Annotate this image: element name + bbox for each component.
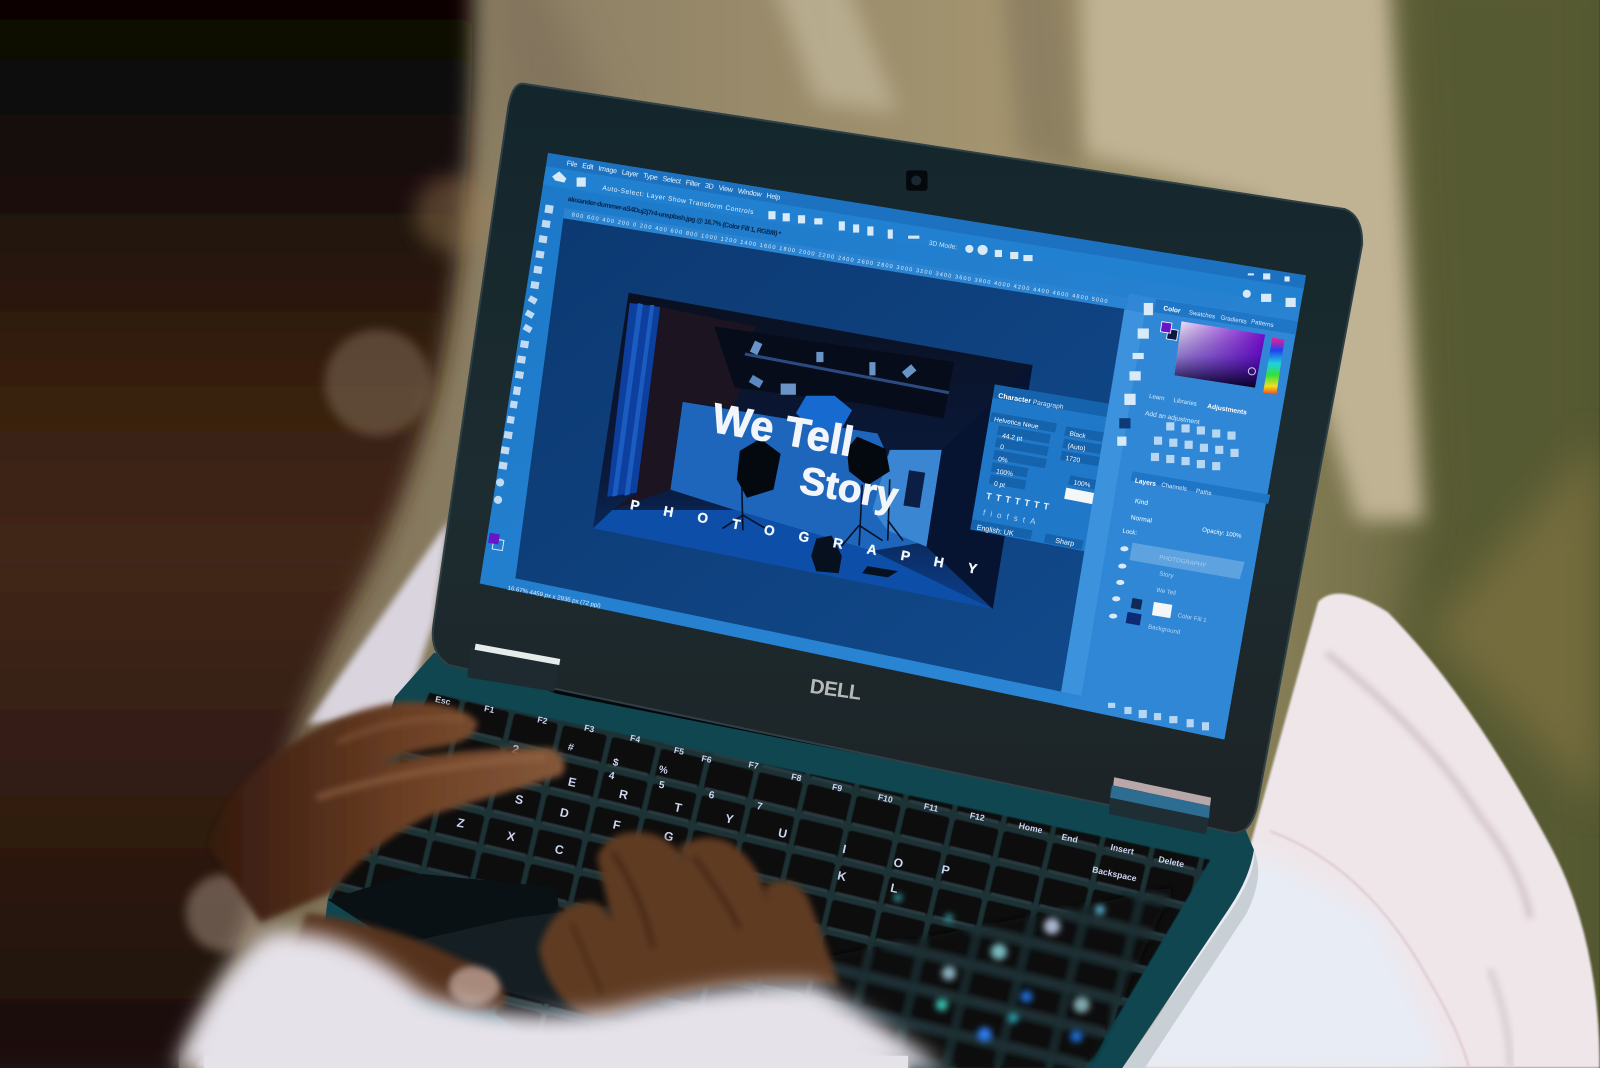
bokeh light bbox=[325, 329, 431, 436]
floor object bbox=[811, 536, 842, 573]
options bar bbox=[543, 166, 1304, 306]
keyboard labels: L bbox=[889, 881, 900, 896]
keyboard labels: $ bbox=[612, 757, 620, 769]
keyboard labels: Z bbox=[456, 815, 466, 831]
thumb bbox=[286, 913, 506, 1012]
hands bbox=[209, 702, 839, 1020]
character panel: fiofstA bbox=[982, 508, 1041, 527]
right curtain bbox=[926, 365, 1033, 609]
document image: studio bbox=[593, 293, 1033, 609]
menu bar: File Edit Image Layer Type Select Filter 3D View Window Help bbox=[566, 159, 781, 202]
option icons bbox=[552, 171, 1033, 261]
right panels: Libraries bbox=[1173, 397, 1197, 408]
keyboard labels: % bbox=[658, 764, 669, 777]
right panels: Background bbox=[1147, 623, 1181, 636]
keyboard labels: D bbox=[559, 805, 570, 821]
blurred key lights bbox=[894, 894, 1105, 1042]
softbox right bbox=[847, 437, 890, 486]
character panel: 100% bbox=[996, 468, 1013, 478]
hinge: left bbox=[467, 644, 560, 692]
keyboard labels bbox=[434, 694, 1185, 896]
right panels: Kind bbox=[1134, 498, 1149, 507]
wall bbox=[670, 402, 934, 551]
adjustment icons bbox=[1151, 422, 1239, 470]
ceiling rig bbox=[714, 326, 954, 418]
ruler: 800 600 400 200 0 200 400 600 800 1000 1200 1400 1600 1800 2000 2200 2400 2600 2800 3000 3200 3400 3600 3800 4000 4200 4400 4600 4800 5000 bbox=[571, 212, 1108, 305]
keyboard labels: 5 bbox=[658, 780, 666, 792]
right panels: Channels bbox=[1161, 482, 1187, 493]
curtain bbox=[607, 303, 660, 497]
keyboard labels: F1 bbox=[483, 703, 496, 715]
keyboard labels: R bbox=[618, 787, 630, 802]
keyboard labels: # bbox=[567, 742, 575, 754]
keyboard labels: I bbox=[841, 842, 847, 856]
keyboard labels: F2 bbox=[536, 714, 549, 726]
keyboard labels: End bbox=[1061, 832, 1079, 845]
tripods bbox=[722, 479, 903, 546]
character panel: Black bbox=[1069, 431, 1087, 440]
keyboard labels: K bbox=[836, 869, 848, 884]
character panel: 100% bbox=[1073, 480, 1091, 489]
keyboard labels: 7 bbox=[756, 801, 764, 813]
keys bbox=[332, 693, 1210, 1068]
right panels: Swatches bbox=[1188, 309, 1216, 321]
keyboard labels: X bbox=[506, 829, 517, 844]
character panel: Character bbox=[998, 392, 1032, 405]
bokeh light bbox=[186, 874, 263, 952]
character panel: Helvetica Neue bbox=[993, 416, 1039, 431]
heading: We Tell: We Tell bbox=[709, 394, 857, 465]
overhead softbox glow bbox=[796, 396, 852, 428]
character panel: 0% bbox=[998, 456, 1008, 465]
right panels: PHOTOGRAPHY bbox=[1159, 554, 1207, 569]
character fields bbox=[970, 412, 1104, 550]
hue slider bbox=[1263, 338, 1285, 395]
keyboard labels: 6 bbox=[708, 790, 716, 802]
window and search icons bbox=[1243, 273, 1296, 307]
keyboard labels: O bbox=[892, 855, 904, 871]
white flat bbox=[872, 450, 942, 547]
right panels: Patterns bbox=[1251, 318, 1274, 329]
keyboard labels: Y bbox=[724, 811, 735, 827]
keyboard labels: Esc bbox=[434, 694, 452, 707]
right panels: We Tell bbox=[1156, 587, 1176, 597]
right panels: Normal bbox=[1130, 514, 1153, 525]
color picker bbox=[1174, 321, 1265, 388]
keyboard labels: P bbox=[940, 862, 951, 878]
character panel: Sharp bbox=[1055, 537, 1075, 548]
right panels: Gradients bbox=[1220, 314, 1247, 326]
character panel: 0 bbox=[1000, 444, 1005, 451]
right panels: Story bbox=[1159, 570, 1175, 580]
keyboard labels: C bbox=[554, 842, 565, 858]
right panels: Paths bbox=[1195, 488, 1212, 497]
character panel: Paragraph bbox=[1032, 399, 1064, 411]
keyboard labels: 4 bbox=[608, 770, 616, 782]
DELL logo: DELL bbox=[808, 676, 862, 705]
status bar: 16.67% 4459 px x 2936 px (72 ppi) bbox=[507, 585, 601, 610]
screen bbox=[480, 153, 1306, 740]
keyboard labels: F7 bbox=[748, 759, 760, 771]
keyboard deck bbox=[306, 653, 1258, 1068]
palm rest bbox=[328, 873, 572, 1010]
background thumbnail bbox=[1126, 612, 1142, 625]
webcam bbox=[906, 170, 928, 191]
options bar: Auto-Select: Layer Show Transform Controls bbox=[602, 185, 755, 216]
right panels: Layers bbox=[1134, 478, 1157, 488]
floor bbox=[593, 510, 993, 609]
keyboard labels: E bbox=[567, 775, 578, 790]
keyboard labels: F5 bbox=[673, 745, 685, 757]
white cloth on the lap bbox=[306, 520, 1600, 1068]
toolbar bbox=[494, 204, 554, 504]
character panel: 44.2 pt bbox=[1002, 433, 1023, 443]
foreground and background swatches bbox=[1160, 322, 1178, 340]
left hand bbox=[209, 702, 565, 923]
keyboard labels: 2 bbox=[511, 742, 520, 757]
softbox left bbox=[737, 439, 781, 498]
layer visibility icons bbox=[1109, 546, 1128, 619]
keyboard labels: T bbox=[673, 800, 684, 816]
canvas area bbox=[515, 218, 1125, 692]
keyboard labels: S bbox=[514, 792, 525, 807]
keyboard labels: F bbox=[612, 818, 622, 833]
right panels: Add an adjustment bbox=[1144, 410, 1200, 426]
blurred white sleeve in the foreground bbox=[176, 932, 944, 1068]
keyboard labels: Insert bbox=[1110, 842, 1135, 857]
keyboard labels: Backspace bbox=[1091, 864, 1138, 884]
character panel: 0 pt bbox=[993, 481, 1006, 489]
keyboard labels: F11 bbox=[923, 801, 939, 814]
layer panel footer icons bbox=[1108, 703, 1209, 730]
foreground color swatch bbox=[488, 533, 504, 551]
photoshop window bbox=[480, 153, 1306, 740]
color fill thumbnail bbox=[1152, 602, 1172, 618]
heading: PHOTOGRAPHY: PHOTOGRAPHY bbox=[629, 497, 1002, 581]
keyboard labels: F12 bbox=[969, 810, 986, 823]
menu bar bbox=[546, 153, 1306, 289]
right panels: Color Fill 1 bbox=[1177, 612, 1208, 624]
bokeh light bbox=[415, 175, 493, 253]
heading: Story: Story bbox=[796, 459, 902, 519]
panel icon column bbox=[1117, 303, 1153, 446]
character panel: (Auto) bbox=[1067, 443, 1086, 453]
keyboard labels: Delete bbox=[1158, 854, 1185, 869]
keyboard labels: F3 bbox=[583, 723, 595, 734]
right panels: Opacity: 100% bbox=[1202, 527, 1242, 540]
right panels: Lock: bbox=[1122, 528, 1138, 537]
character panel bbox=[970, 385, 1116, 552]
keys out of focus bbox=[816, 887, 1173, 1068]
right panels: Adjustments bbox=[1207, 403, 1248, 417]
character panel: TTTTTTT bbox=[985, 491, 1054, 513]
trackpad bbox=[403, 903, 663, 1020]
character panel: 1720 bbox=[1065, 455, 1081, 465]
right panels: Learn bbox=[1149, 393, 1165, 402]
right panels: Color bbox=[1163, 305, 1181, 315]
options bar: 3D Mode: bbox=[928, 240, 958, 251]
right hand bbox=[539, 832, 839, 1020]
color swatch bbox=[1064, 488, 1098, 505]
keyboard labels: F9 bbox=[831, 782, 843, 794]
right panels bbox=[1061, 294, 1298, 740]
hinge: right bbox=[1109, 777, 1211, 834]
keyboard labels: F4 bbox=[629, 733, 641, 745]
laptop lid bezel bbox=[433, 84, 1362, 833]
keyboard labels: F8 bbox=[790, 771, 803, 783]
layer rows bbox=[1129, 543, 1245, 579]
document tab: alexander-dummer-aS4Duj2j7r4-unsplash.jpg @ 16.7% (Color Fill 1, RGB/8) * bbox=[567, 196, 782, 238]
keyboard labels: G bbox=[663, 829, 675, 844]
character panel: English: UK bbox=[976, 524, 1014, 538]
keyboard labels: Home bbox=[1018, 820, 1044, 835]
keyboard labels: U bbox=[777, 826, 789, 841]
laptop bbox=[306, 84, 1362, 1068]
hinge bar shadow bbox=[449, 653, 1240, 828]
keyboard labels: F6 bbox=[701, 753, 713, 765]
blurred person in the foreground bbox=[0, 0, 493, 1068]
keyboard labels: F10 bbox=[877, 792, 894, 805]
